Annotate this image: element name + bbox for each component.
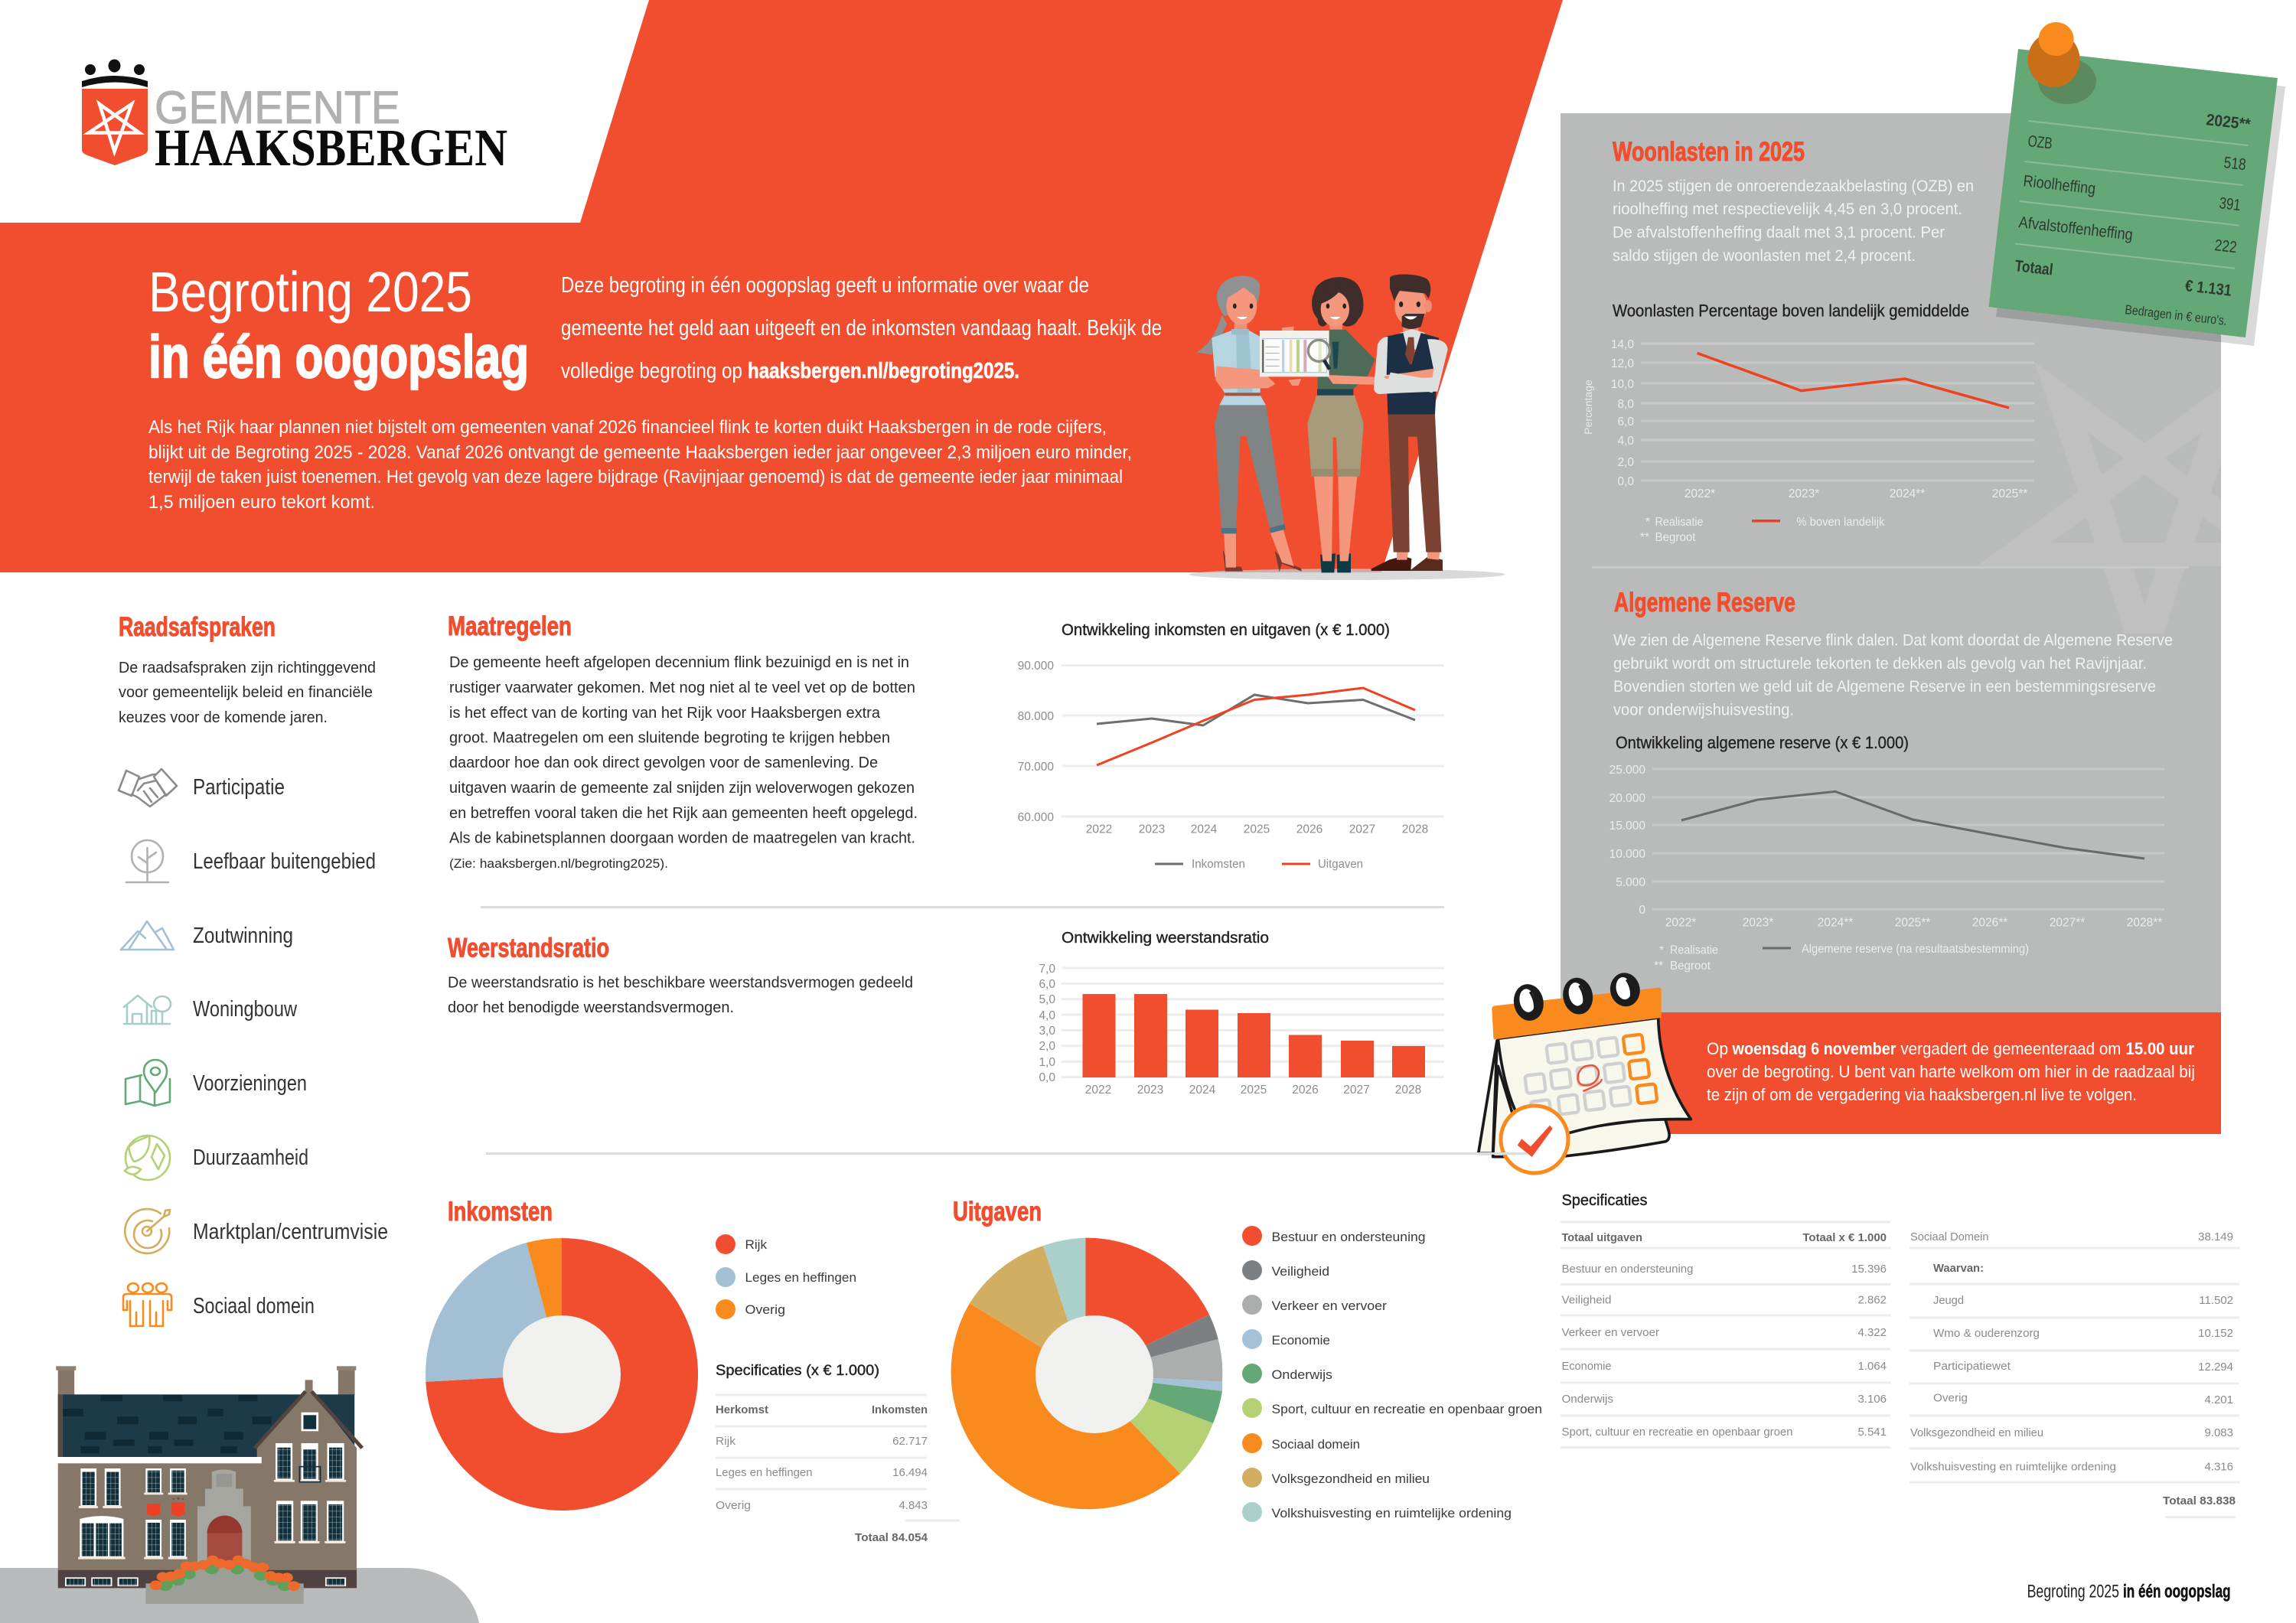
callout: raadsvergadering: vergadert de gemeenteraad om [1900,1039,2121,1058]
line chart: inkomsten en uitgaven: 2022 [1086,823,1112,836]
donut chart: inkomsten [426,1238,698,1511]
line chart: percentage boven landelijk: 10,0 [1611,378,1634,391]
line chart: percentage boven landelijk [1582,338,2034,544]
line chart: algemene reserve: 2027** [2050,916,2085,929]
line chart: algemene reserve: Begroot [1670,960,1711,973]
table: specificaties inkomsten: 62.717 [892,1435,928,1448]
table: specificaties uitgaven: Sport, cultuur en recreatie en openbaar groen [1561,1426,1792,1439]
logo: Gemeente Haaksbergen [82,60,507,177]
text block [1613,178,1974,265]
footer title: in één oogopslag [2123,1581,2231,1602]
legend: Sociaal domein [1272,1437,1360,1452]
hero paragraph: Als het Rijk haar plannen niet bijstelt om gemeenten vanaf 2026 financieel flink te korten duikt Haaksbergen in de rode cijfers, [148,417,1107,438]
text block: (Zie: haaksbergen.nl/begroting2025). [449,856,668,871]
table: specificaties uitgaven: 10.152 [2198,1327,2233,1340]
table: specificaties uitgaven: Economie [1561,1360,1612,1373]
table: specificaties uitgaven: Overig [1933,1391,1968,1405]
heading: Inkomsten [448,1197,553,1227]
hero paragraph [148,417,1132,513]
line chart: inkomsten en uitgaven: 2023 [1139,823,1165,836]
text block [449,654,918,871]
legend: Volksgezondheid en milieu [1272,1471,1430,1486]
line chart: percentage boven landelijk: Percentage [1582,380,1594,435]
table: specificaties uitgaven: 38.149 [2198,1230,2233,1243]
chart heading: Ontwikkeling algemene reserve (x € 1.000) [1616,733,1909,752]
text block: We zien de Algemene Reserve flink dalen. Dat komt doordat de Algemene Reserve [1613,632,2173,650]
title [148,260,529,390]
line chart: percentage boven landelijk: 2,0 [1617,456,1634,469]
footer title [2027,1581,2231,1602]
line chart: algemene reserve: Algemene reserve (na resultaatsbestemming) [1802,943,2029,956]
bar chart: ontwikkeling weerstandsratio: 2025 [1241,1084,1267,1097]
line chart: inkomsten en uitgaven: 2027 [1349,823,1375,836]
text block: voor onderwijshuisvesting. [1613,701,1794,719]
icon: mountains [121,921,174,950]
text block: De raadsafspraken zijn richtinggevend [119,660,376,676]
table: specificaties inkomsten: Inkomsten [872,1403,928,1416]
logo text [155,82,507,177]
table: specificaties uitgaven: 4.322 [1857,1326,1887,1339]
line chart: algemene reserve: 2023* [1743,916,1773,929]
line chart: percentage boven landelijk: Begroot [1655,531,1696,544]
icon: target [125,1209,170,1253]
divider [486,1152,1527,1155]
bar chart: ontwikkeling weerstandsratio [1039,930,1444,1097]
line chart: algemene reserve: 2028** [2127,916,2162,929]
line chart: percentage boven landelijk: 2025** [1992,487,2027,500]
table: specificaties inkomsten [716,1363,960,1544]
hero intro text: Deze begroting in één oogopslag geeft u informatie over waar de [561,273,1089,298]
text block: gebruikt wordt om structurele tekorten te dekken als gevolg van het Ravijnjaar. [1613,655,2147,673]
text block: is het effect van de korting van het Rijk voor Haaksbergen extra [449,705,881,722]
panel: Maatregelen [448,611,918,871]
hero intro text: gemeente het geld aan uitgeeft en de inkomsten vandaag haalt. Bekijk de [561,316,1162,341]
table: specificaties inkomsten: Rijk [716,1435,736,1448]
table: specificaties uitgaven: 4.316 [2204,1460,2233,1474]
hero banner background [0,0,1563,572]
line chart: inkomsten en uitgaven: Inkomsten [1192,858,1245,871]
table: specificaties uitgaven: Volksgezondheid en milieu [1910,1426,2043,1439]
callout: raadsvergadering: 15.00 uur [2126,1039,2194,1058]
legend: Bestuur en ondersteuning [1272,1230,1425,1244]
table: specificaties uitgaven: 12.294 [2198,1361,2233,1374]
line chart: algemene reserve: * [1659,944,1664,957]
icon: map with pin [126,1060,170,1106]
text block [119,660,376,726]
text block: door het benodigde weerstandsvermogen. [448,999,734,1016]
legend: Overig [745,1302,785,1317]
line chart: percentage boven landelijk: 14,0 [1611,338,1634,351]
legend [716,1234,856,1319]
line chart: percentage boven landelijk: ** [1640,531,1649,544]
legend [1242,1226,1542,1522]
note: woonlasten table pinned: 2025** [2205,111,2252,134]
text block: voor gemeentelijk beleid en financiële [119,684,373,701]
table: specificaties uitgaven: Jeugd [1933,1294,1964,1307]
legend: Volkshuisvesting en ruimtelijke ordening [1272,1506,1512,1520]
icon: push pin [2028,22,2096,104]
line chart: algemene reserve: 5.000 [1616,876,1645,889]
label: Leefbaar buitengebied [193,849,376,874]
callout: raadsvergadering: Op [1707,1039,1728,1058]
chart heading: Woonlasten Percentage boven landelijk gemiddelde [1613,301,1969,320]
table: specificaties inkomsten: Leges en heffingen [716,1466,813,1479]
text block: De afvalstoffenheffing daalt met 3,1 procent. Per [1613,223,1945,242]
line chart: inkomsten en uitgaven: 2025 [1244,823,1270,836]
icon: tree [126,840,168,882]
text block: De weerstandsratio is het beschikbare weerstandsvermogen gedeeld [448,975,913,992]
table: specificaties inkomsten: Overig [716,1499,751,1512]
table: specificaties uitgaven: 15.396 [1851,1263,1887,1276]
bar chart: ontwikkeling weerstandsratio: 7,0 [1039,963,1055,976]
text block: keuzes voor de komende jaren. [119,709,328,726]
note: woonlasten table pinned: 222 [2213,236,2238,256]
hero paragraph: blijkt uit de Begroting 2025 - 2028. Vanaf 2026 ontvangt de gemeente Haaksbergen ieder jaar ongeveer 2,3 miljoen euro minder, [148,442,1132,463]
text block: In 2025 stijgen de onroerendezaakbelasting (OZB) en [1613,178,1974,195]
note: woonlasten table pinned: Totaal [2014,257,2054,279]
illustration: town hall [56,1366,362,1604]
line chart: algemene reserve: 2024** [1818,916,1853,929]
line chart: percentage boven landelijk: 12,0 [1611,357,1634,370]
table: specificaties inkomsten: Herkomst [716,1403,768,1416]
line chart: percentage boven landelijk: 2022* [1684,487,1715,500]
table: specificaties uitgaven: 4.201 [2204,1393,2233,1406]
heading: Raadsafspraken [119,612,276,642]
panel: Uitgaven [951,1197,1542,1522]
note: woonlasten table pinned: Afvalstoffenheffing [2017,213,2134,244]
line chart: inkomsten en uitgaven: 2028 [1402,823,1428,836]
bar chart: ontwikkeling weerstandsratio: 2023 [1137,1084,1163,1097]
line chart: percentage boven landelijk: 4,0 [1617,435,1634,448]
note: woonlasten table pinned: 518 [2223,154,2247,174]
line chart: algemene reserve: 25.000 [1609,764,1645,777]
line chart: algemene reserve: Realisatie [1670,944,1718,957]
panel: Raadsafspraken [119,612,388,1326]
label: Voorzieningen [193,1071,307,1096]
panel: Weerstandsratio [448,934,913,1016]
bar chart: ontwikkeling weerstandsratio: 1,0 [1039,1056,1055,1069]
note: woonlasten table pinned: Bedragen in € euro's. [2125,302,2228,328]
line chart: percentage boven landelijk: % boven landelijk [1796,516,1885,529]
line chart: algemene reserve: 0 [1639,904,1645,917]
table: specificaties uitgaven: 11.502 [2199,1294,2233,1307]
illustration: three people with document [1189,275,1505,580]
text block: saldo stijgen de woonlasten met 2,4 procent. [1613,247,1916,265]
icon: houses and tree [124,996,171,1024]
note: woonlasten table pinned: Rioolheffing [2022,172,2096,198]
line chart: percentage boven landelijk: 0,0 [1617,475,1634,488]
text block: uitgaven waarin de gemeente zal snijden zijn weloverwogen gekozen [449,780,915,797]
table: specificaties uitgaven: Veiligheid [1561,1294,1612,1307]
hero intro text: haaksbergen.nl/begroting2025. [748,359,1019,383]
text block: rustiger vaarwater gekomen. Met nog niet al te veel vet op de botten [449,680,915,696]
table: specificaties uitgaven: Wmo & ouderenzorg [1933,1327,2040,1340]
panel: Inkomsten [426,1197,960,1544]
text block: Als de kabinetsplannen doorgaan worden de maatregelen van kracht. [449,829,915,846]
label: Duurzaamheid [193,1146,308,1170]
bar chart: ontwikkeling weerstandsratio: 2028 [1395,1084,1421,1097]
bar chart: ontwikkeling weerstandsratio: 2022 [1085,1084,1111,1097]
callout: raadsvergadering: over de begroting. U bent van harte welkom om hier in de raadzaal bij [1707,1062,2195,1081]
panel: Woonlasten in 2025 [1582,137,2034,544]
table: specificaties uitgaven: Totaal uitgaven [1561,1231,1642,1244]
bar chart: ontwikkeling weerstandsratio: 0,0 [1039,1071,1055,1084]
text block [1613,632,2173,719]
logo text: HAAKSBERGEN [155,119,507,177]
legend: Sport, cultuur en recreatie en openbaar groen [1272,1402,1542,1416]
table: specificaties uitgaven: Volkshuisvesting en ruimtelijke ordening [1910,1460,2116,1474]
hero intro text [561,273,1162,383]
logo text: GEMEENTE [155,82,400,133]
callout: raadsvergadering [1607,1012,2221,1134]
icon: handshake [119,769,177,807]
bar chart: ontwikkeling weerstandsratio: Ontwikkeling weerstandsratio [1062,930,1269,947]
table: specificaties uitgaven: 1.064 [1857,1360,1887,1373]
text block [448,975,913,1016]
line chart: inkomsten en uitgaven: Ontwikkeling inkomsten en uitgaven (x € 1.000) [1062,621,1390,639]
text block: rioolheffing met respectievelijk 4,45 en 3,0 procent. [1613,200,1962,218]
bar chart: ontwikkeling weerstandsratio: 2027 [1343,1084,1370,1097]
line chart: algemene reserve: 15.000 [1609,820,1645,833]
title: Begroting 2025 [148,260,472,324]
icon: earth and leaf [125,1136,170,1180]
line chart: inkomsten en uitgaven: 2024 [1191,823,1218,836]
line chart: percentage boven landelijk: 2024** [1890,487,1925,500]
table: specificaties inkomsten: Specificaties (x € 1.000) [716,1363,879,1379]
table: specificaties uitgaven: 2.862 [1857,1294,1887,1307]
icon: people [123,1283,171,1326]
table: specificaties uitgaven: Totaal x € 1.000 [1802,1231,1887,1244]
footer title: Begroting 2025 [2027,1581,2119,1602]
table: specificaties uitgaven: 3.106 [1857,1393,1887,1406]
table: specificaties uitgaven: Participatiewet [1933,1360,2011,1373]
hero intro text: volledige begroting op [561,359,742,383]
bar chart: ontwikkeling weerstandsratio: 5,0 [1039,993,1055,1006]
legend: Rijk [745,1237,767,1252]
legend: Verkeer en vervoer [1272,1299,1387,1313]
line chart: percentage boven landelijk: 2023* [1789,487,1819,500]
note: woonlasten table pinned: € 1.131 [2184,277,2232,300]
line chart: inkomsten en uitgaven: Uitgaven [1318,858,1363,871]
line chart: percentage boven landelijk: Realisatie [1655,516,1704,529]
table: specificaties uitgaven: Verkeer en vervoer [1561,1326,1659,1339]
note: woonlasten table pinned: 391 [2218,194,2242,214]
bar chart: ontwikkeling weerstandsratio: 6,0 [1039,978,1055,991]
legend: Onderwijs [1272,1367,1332,1382]
line chart: inkomsten en uitgaven [1018,621,1444,871]
bar chart: ontwikkeling weerstandsratio: 3,0 [1039,1025,1055,1038]
line chart: percentage boven landelijk: 8,0 [1617,398,1634,411]
text block: De gemeente heeft afgelopen decennium flink bezuinigd en is net in [449,654,909,671]
table: specificaties uitgaven: Bestuur en ondersteuning [1561,1263,1693,1276]
line chart: inkomsten en uitgaven: 60.000 [1018,811,1054,824]
bar chart: ontwikkeling weerstandsratio: 4,0 [1039,1009,1055,1022]
hero paragraph: terwijl de taken juist toenemen. Het gevolg van deze lagere bijdrage (Ravijnjaar genoemd) is dat de gemeente ieder jaar minimaal [148,467,1123,487]
donut chart: uitgaven [951,1238,1222,1509]
label: Zoutwinning [193,924,293,948]
illustration: ground [0,1568,479,1623]
line chart: algemene reserve: 20.000 [1609,792,1645,805]
note: woonlasten table pinned [1988,49,2285,346]
heading: Maatregelen [448,611,572,641]
text block: en betreffen vooral taken die het Rijk aan gemeenten heeft opgelegd. [449,805,918,822]
table: specificaties uitgaven: Onderwijs [1561,1393,1613,1406]
line chart: algemene reserve: 2022* [1665,916,1696,929]
hero paragraph: 1,5 miljoen euro tekort komt. [148,492,375,513]
divider [481,906,1444,908]
callout: raadsvergadering: woensdag 6 november [1732,1039,1896,1058]
table: specificaties uitgaven: Waarvan: [1933,1262,1984,1275]
text block: groot. Maatregelen om een sluitende begroting te krijgen hebben [449,730,890,747]
table: specificaties uitgaven: Totaal 83.838 [2163,1494,2236,1507]
heading: Weerstandsratio [448,934,609,963]
bar chart: ontwikkeling weerstandsratio: 2026 [1292,1084,1319,1097]
heading: Uitgaven [953,1197,1042,1227]
line chart: inkomsten en uitgaven: 80.000 [1018,710,1054,723]
icon: crown and shield [82,60,148,165]
icon: calendar [1479,970,1691,1173]
table: specificaties uitgaven: Specificaties [1561,1192,1647,1209]
line chart: inkomsten en uitgaven: 70.000 [1018,761,1054,774]
label: Participatie [193,775,285,800]
table: specificaties uitgaven [1561,1192,2239,1517]
table: specificaties uitgaven: Sociaal Domein [1910,1230,1988,1243]
legend: Economie [1272,1333,1330,1348]
line chart: algemene reserve [1609,764,2164,973]
label: Marktplan/centrumvisie [193,1220,388,1244]
callout: raadsvergadering: te zijn of om de vergadering via haaksbergen.nl live te volgen. [1707,1085,2137,1104]
table: specificaties inkomsten: 16.494 [892,1466,928,1479]
panel: Algemene Reserve [1609,588,2173,973]
table: specificaties uitgaven: 9.083 [2204,1426,2233,1439]
table: specificaties inkomsten: Totaal 84.054 [855,1531,928,1544]
line chart: inkomsten en uitgaven: 90.000 [1018,660,1054,673]
line chart: inkomsten en uitgaven: 2026 [1296,823,1322,836]
table: specificaties inkomsten: 4.843 [899,1499,928,1512]
label: Sociaal domein [193,1294,315,1318]
line chart: percentage boven landelijk: 6,0 [1617,416,1634,429]
line chart: algemene reserve: 10.000 [1609,848,1645,861]
bar chart: ontwikkeling weerstandsratio: 2024 [1189,1084,1216,1097]
legend: Leges en heffingen [745,1270,856,1285]
text block: daardoor hoe dan ook direct gevolgen voor de samenleving. De [449,754,878,771]
heading: Woonlasten in 2025 [1613,137,1805,167]
line chart: algemene reserve: 2025** [1895,916,1930,929]
line chart: algemene reserve: ** [1654,960,1663,973]
bar chart: ontwikkeling weerstandsratio: 2,0 [1039,1040,1055,1053]
note: woonlasten table pinned: OZB [2027,132,2053,153]
label: Woningbouw [193,997,298,1022]
legend: Veiligheid [1272,1264,1329,1279]
table: specificaties uitgaven: 5.541 [1857,1426,1887,1439]
text block: Bovendien storten we geld uit de Algemene Reserve in een bestemmingsreserve [1613,678,2156,696]
line chart: percentage boven landelijk: * [1645,516,1650,529]
line chart: algemene reserve: 2026** [1972,916,2007,929]
title: in één oogopslag [148,323,529,390]
heading: Algemene Reserve [1614,588,1795,618]
panel: grey sidebar background [1561,113,2221,1012]
